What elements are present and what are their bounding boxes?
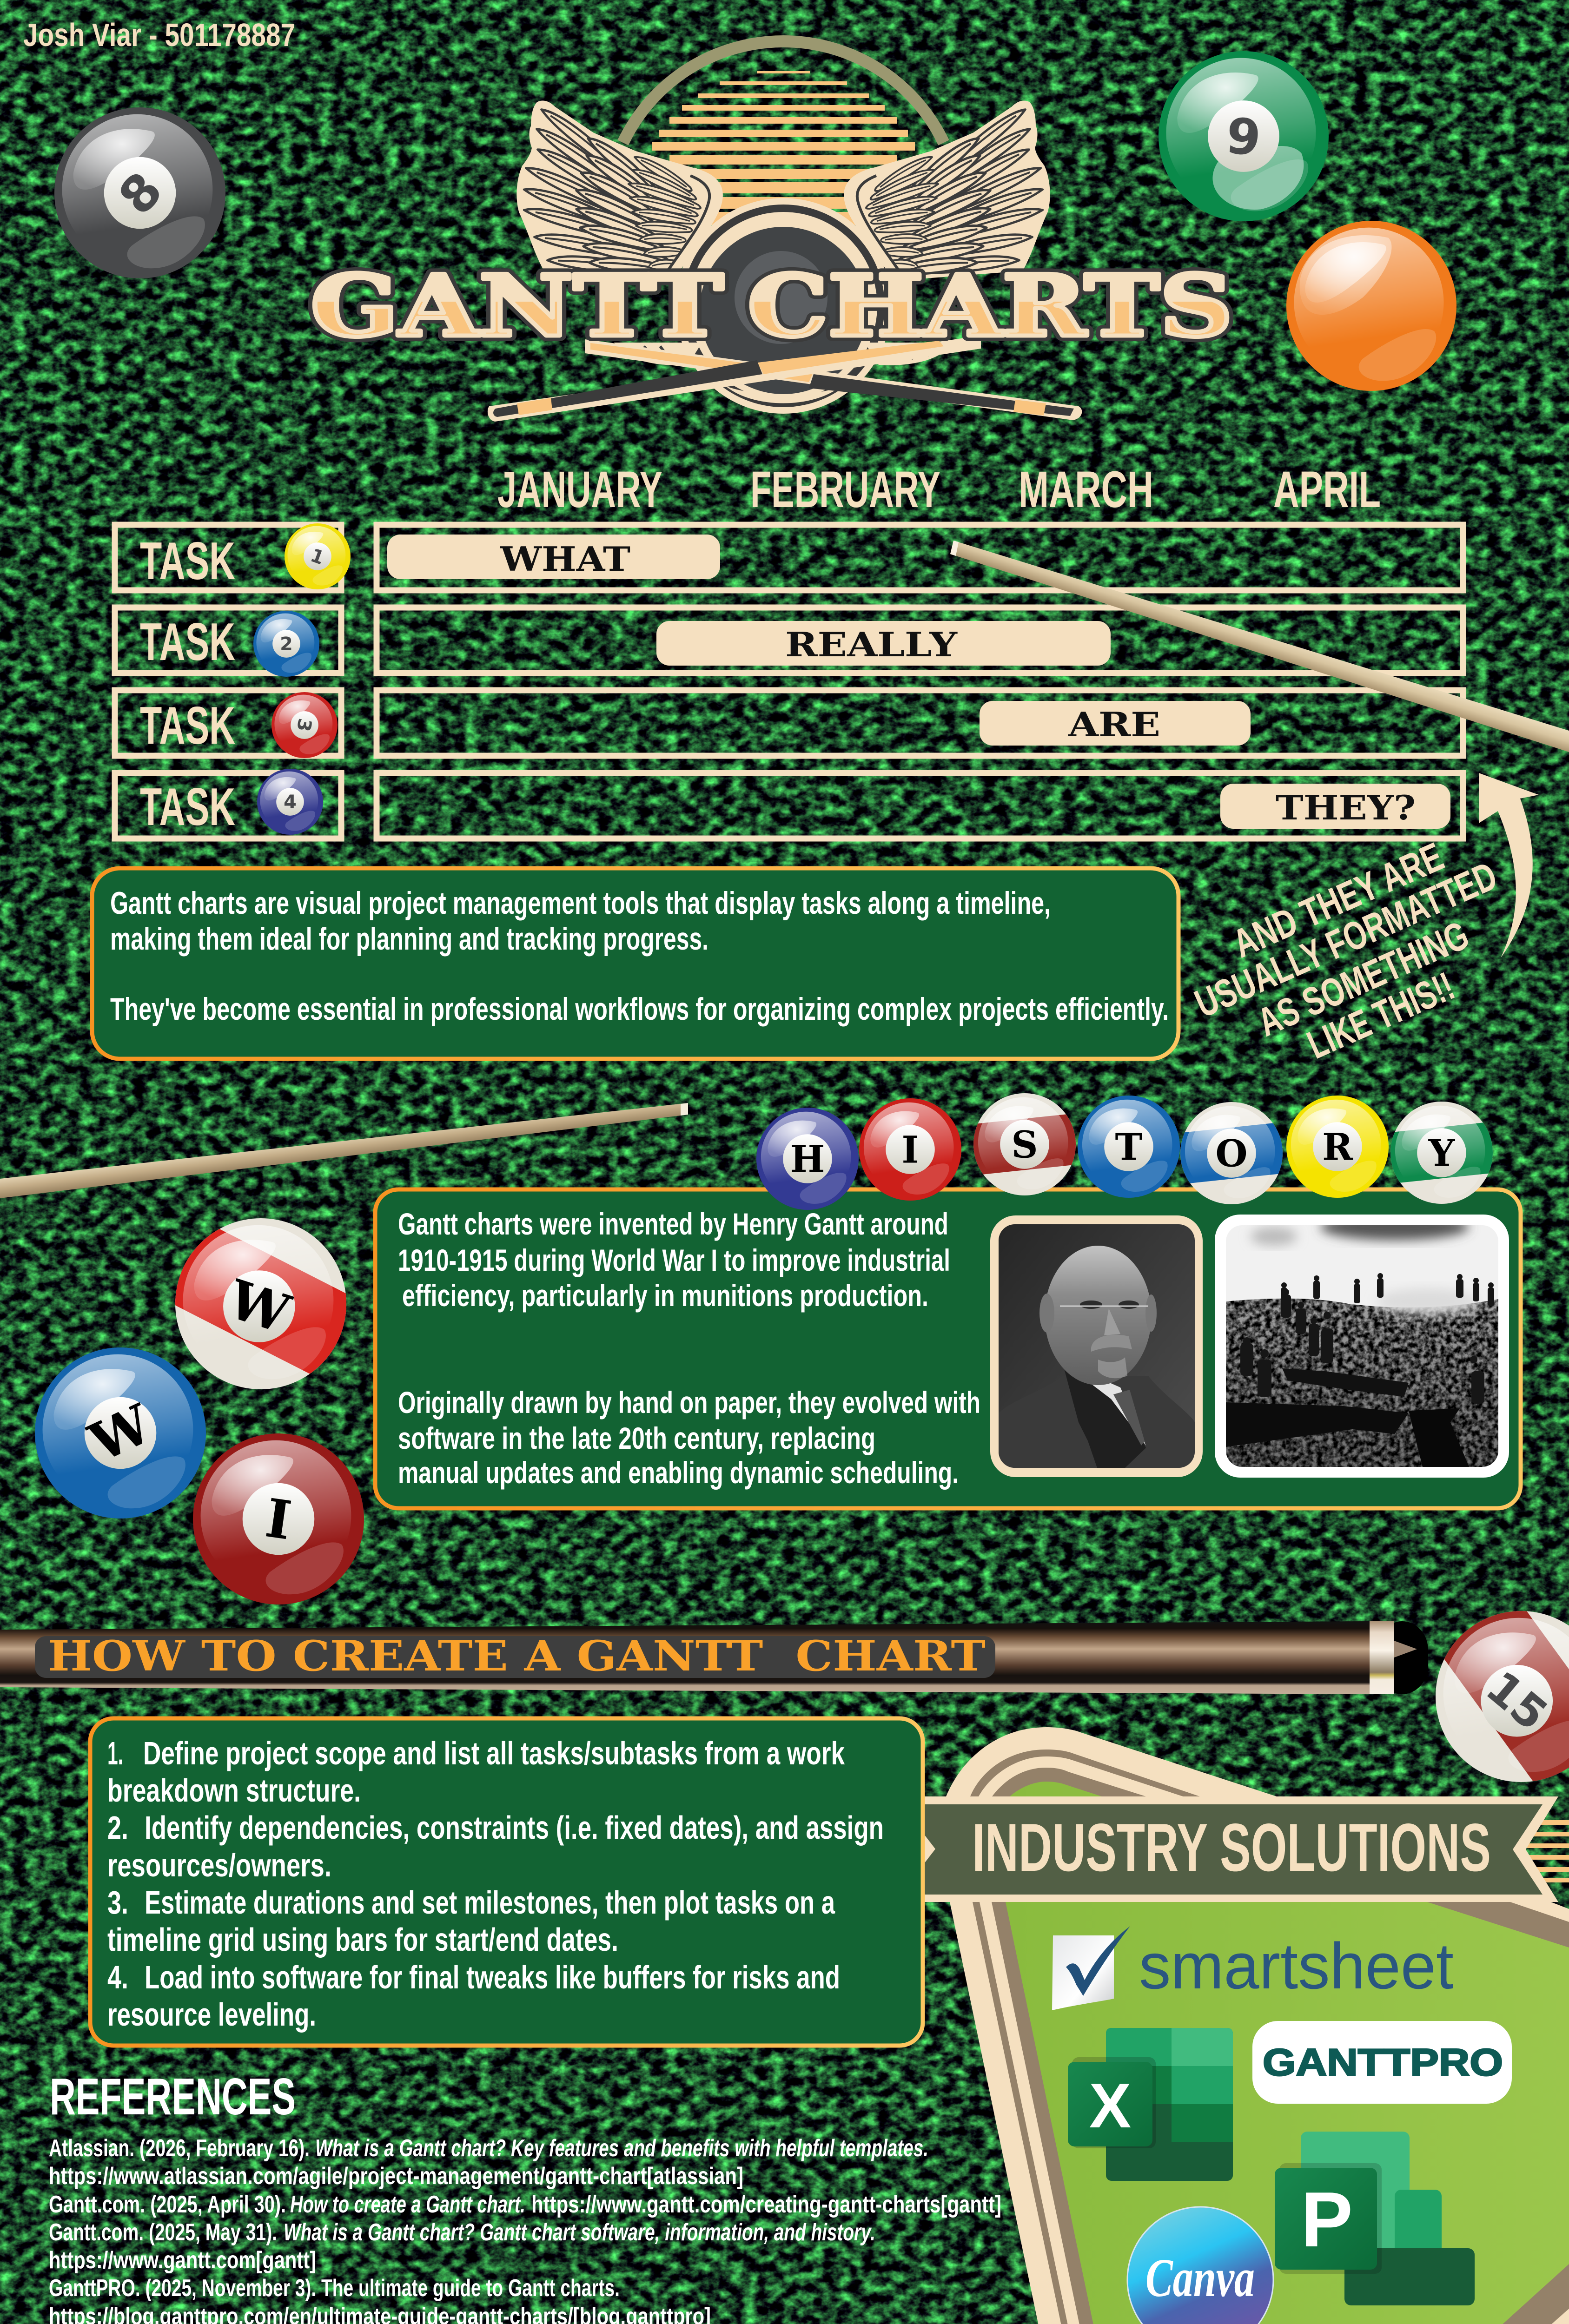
panel: how to steps: Estimate durations and set milestones, then plot tasks on a xyxy=(145,1884,835,1921)
gantt bar: THEY?: THEY? xyxy=(1276,788,1416,827)
panel: history: efficiency, particularly in munitions production. xyxy=(402,1278,928,1313)
gantt bar: WHAT xyxy=(387,535,720,579)
banner stripes right of ribbon xyxy=(1527,1820,1569,1882)
icon: fifteen ball xyxy=(1423,1574,1569,1810)
rotated callout text: LIKE THIS!! xyxy=(1301,964,1461,1068)
billiard rack: industry solutions backdrop xyxy=(946,1727,1569,2324)
photo: Henry Gantt portrait xyxy=(990,1215,1203,1477)
cue banner: how to create xyxy=(0,1621,1428,1694)
panel: how to steps: resource leveling. xyxy=(107,1996,316,2033)
logo: Excel: X xyxy=(1089,2070,1131,2141)
rotated callout text: AS SOMETHING xyxy=(1251,912,1475,1045)
references list: GanttPRO. (2025, November 3). The ultimate guide to Gantt charts. xyxy=(49,2275,620,2302)
panel: how to steps: resources/owners. xyxy=(107,1847,331,1883)
panel: history xyxy=(375,1189,1521,1508)
icon: ball letter H: H xyxy=(790,1138,825,1181)
icon: orange ball xyxy=(1286,221,1456,391)
arrow: curved up to chart xyxy=(1479,773,1539,958)
logo: smartsheet: smartsheet xyxy=(1139,1929,1454,2002)
author name: Josh Viar - 501178887 xyxy=(23,17,295,53)
panel: how to steps: Define project scope and list all tasks/subtasks from a work xyxy=(143,1735,845,1771)
gantt bar: ARE: ARE xyxy=(1068,705,1160,744)
logo: right wing xyxy=(845,102,1049,365)
icon: nine ball: 9 xyxy=(1224,107,1264,168)
references list: Gantt.com. (2025, April 30). xyxy=(49,2191,286,2218)
cue stick pointing at chart xyxy=(950,541,1569,752)
icon: fifteen ball: 15 xyxy=(1476,1661,1557,1741)
icon: ball letter I xyxy=(859,1098,961,1201)
icon: ball I dark red: I xyxy=(262,1486,295,1552)
logo: Excel xyxy=(1068,2028,1233,2181)
month headers xyxy=(497,461,1381,518)
logo: Canva: Canva xyxy=(1145,2247,1255,2308)
panel: history: Gantt charts were invented by Henry Gantt around xyxy=(398,1207,948,1241)
rotated callout text: AND THEY ARE xyxy=(1226,834,1450,966)
icon: ball W red stripe: W xyxy=(221,1268,298,1346)
panel: how to steps: 3. xyxy=(107,1884,128,1921)
panel: how to steps: 1. xyxy=(107,1735,123,1771)
logo: central billiard ball emblem xyxy=(675,198,891,414)
task labels: TASK xyxy=(140,532,235,591)
banner: industry solutions xyxy=(923,1796,1558,1902)
panel: introduction: Gantt charts are visual project management tools that display tasks along a timeline, xyxy=(110,885,1051,921)
logo: smartsheet xyxy=(1052,1926,1454,2010)
panel: how to steps: breakdown structure. xyxy=(107,1772,361,1809)
title: GANTT CHARTS: CHARTS xyxy=(748,256,1233,356)
icon: ball letter R xyxy=(1286,1096,1389,1198)
rotated callout text xyxy=(1189,834,1503,1068)
task labels: TASK xyxy=(140,696,235,755)
icon: ball 1 xyxy=(285,523,351,589)
gantt chart grid xyxy=(115,525,1463,838)
references heading: REFERENCES xyxy=(50,2068,296,2126)
panel: how to steps: 2. xyxy=(107,1809,128,1846)
panel: history: 1910-1915 during World War I to improve industrial xyxy=(398,1243,950,1277)
icon: ball 3 xyxy=(271,692,338,758)
panel: how to steps: timeline grid using bars for start/end dates. xyxy=(107,1921,618,1958)
icon: ball 2: 2 xyxy=(280,634,293,655)
panel: history: Originally drawn by hand on paper, they evolved with xyxy=(398,1385,980,1419)
icon: ball letter S: S xyxy=(1011,1123,1038,1167)
icon: ball letter I: I xyxy=(901,1129,919,1172)
references list: What is a Gantt chart? Key features and benefits with helpful templates. xyxy=(315,2135,928,2162)
references list: Gantt.com. (2025, May 31). xyxy=(49,2219,277,2246)
icon: ball letter R: R xyxy=(1322,1126,1353,1169)
icon: ball letter S xyxy=(961,1093,1088,1195)
gantt bar: WHAT: WHAT xyxy=(500,539,630,579)
photo: WWI trench battlefield xyxy=(1215,1214,1509,1478)
icon: ball I dark red xyxy=(193,1433,364,1604)
logo: GanttPRO xyxy=(1252,2021,1512,2104)
gantt bar: THEY? xyxy=(1220,784,1450,829)
panel: how to steps: Identify dependencies, constraints (i.e. fixed dates), and assign xyxy=(145,1809,884,1846)
logo: crossed cue sticks xyxy=(488,336,1082,422)
logo: MS Project xyxy=(1275,2132,1475,2305)
cue banner: how to create: HOW TO CREATE A GANTT CHART xyxy=(48,1631,986,1681)
icon: ball 2 xyxy=(253,611,319,677)
references list: How to create a Gantt chart. xyxy=(290,2191,525,2218)
logo: GanttPRO: GANTTPRO xyxy=(1263,2041,1503,2084)
references list: https://www.gantt.com[gantt] xyxy=(49,2247,316,2274)
gantt bar: REALLY: REALLY xyxy=(785,625,958,664)
references list: What is a Gantt chart? Gantt chart software, information, and history. xyxy=(284,2219,875,2246)
panel: introduction xyxy=(92,868,1178,1059)
panel: how to steps: 4. xyxy=(107,1959,128,1995)
month headers: JANUARY xyxy=(497,461,662,518)
icon: ball W red stripe xyxy=(151,1215,374,1389)
icon: ball letter O xyxy=(1168,1102,1295,1204)
panel: introduction: making them ideal for planning and tracking progress. xyxy=(110,921,708,957)
task labels: TASK xyxy=(140,778,235,837)
icon: ball letter O: O xyxy=(1216,1132,1247,1175)
gantt bar: REALLY xyxy=(656,621,1111,666)
references list: Atlassian. (2026, February 16). xyxy=(49,2135,310,2162)
title: GANTT CHARTS: GANTT xyxy=(311,256,723,356)
icon: ball 4 xyxy=(257,769,323,835)
task labels xyxy=(140,532,235,837)
icon: ball 4: 4 xyxy=(284,792,297,813)
month headers: APRIL xyxy=(1273,461,1381,518)
month headers: MARCH xyxy=(1019,461,1153,518)
icon: eight ball: 8 xyxy=(108,162,174,226)
icon: ball letter Y: Y xyxy=(1428,1132,1456,1175)
cue stick left xyxy=(0,1103,688,1198)
title: GANTT CHARTS: GANTT xyxy=(311,256,723,356)
task labels: TASK xyxy=(140,613,235,672)
logo: Canva xyxy=(1127,2207,1273,2324)
icon: ball W blue: W xyxy=(80,1392,161,1474)
panel: history: software in the late 20th century, replacing xyxy=(398,1421,875,1455)
icon: ball letter T xyxy=(1078,1096,1180,1198)
title: GANTT CHARTS: CHARTS xyxy=(748,256,1233,356)
icon: ball W blue xyxy=(35,1347,206,1519)
panel: how to steps xyxy=(90,1718,923,2046)
references list: https://www.gantt.com/creating-gantt-charts[gantt] xyxy=(531,2191,1001,2218)
icon: ball 3: 3 xyxy=(292,717,316,733)
gantt bar: ARE xyxy=(980,701,1251,746)
panel: history: manual updates and enabling dynamic scheduling. xyxy=(398,1455,959,1490)
icon: eight ball xyxy=(54,107,225,278)
icon: ball 1: 1 xyxy=(308,545,327,569)
month headers: FEBRUARY xyxy=(750,461,940,518)
icon: ball letter H xyxy=(756,1108,859,1210)
logo: left wing xyxy=(518,102,722,365)
panel: how to steps: Load into software for final tweaks like buffers for risks and xyxy=(145,1959,840,1995)
icon: ball letter Y xyxy=(1378,1102,1505,1204)
logo: MS Project: P xyxy=(1301,2176,1353,2263)
references list: https://www.atlassian.com/agile/project-management/gantt-chart[atlassian] xyxy=(49,2163,743,2190)
panel: introduction: They've become essential in professional workflows for organizing complex projects efficiently. xyxy=(110,991,1169,1027)
icon: ball letter T: T xyxy=(1115,1126,1143,1169)
logo: sun stripes and halo arc xyxy=(623,41,944,225)
title: GANTT CHARTS xyxy=(311,256,1233,356)
icon: nine ball xyxy=(1159,51,1329,221)
references list xyxy=(49,2135,1001,2324)
